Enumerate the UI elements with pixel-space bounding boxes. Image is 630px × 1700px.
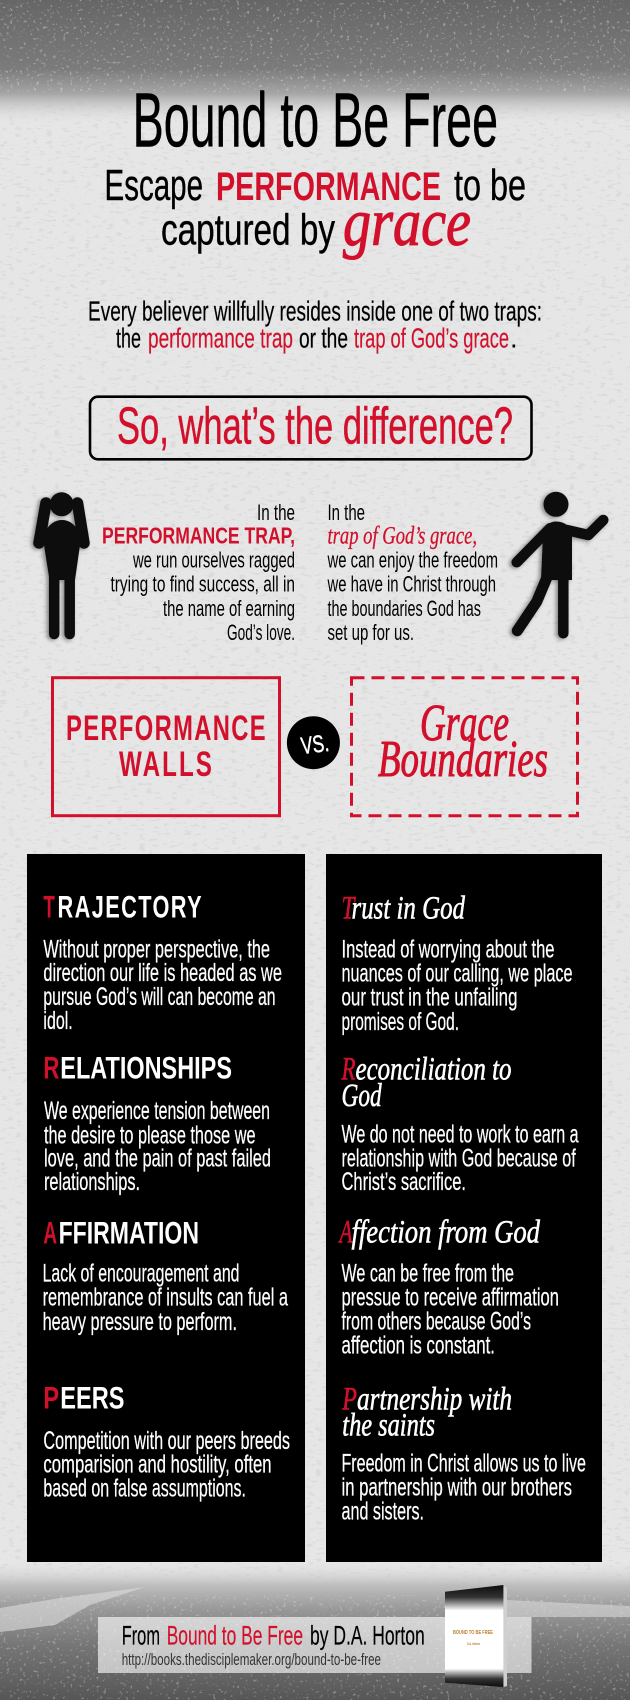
text: affirmation description (43, 1260, 288, 1336)
footer credit band: by D.A. Horton (310, 1620, 425, 1650)
text: trust description: promises of God. (342, 1008, 459, 1036)
text: relationships description: We experience tension between (44, 1097, 270, 1125)
heading: affection from god: A (338, 1215, 353, 1251)
intro text: . (510, 323, 518, 354)
heading: relationships (43, 1049, 232, 1085)
footer credit band (98, 1617, 532, 1673)
text: trap of grace description: we have in Christ through (327, 572, 496, 597)
icon: book cover: BOUND TO BE FREE (453, 1630, 494, 1636)
subtitle: grace (343, 184, 471, 260)
text: reconciliation description (342, 1121, 579, 1196)
text: reconciliation description: Christ’s sacrifice. (342, 1168, 466, 1196)
text: partnership description (342, 1450, 586, 1525)
panel: grace boundaries list (326, 854, 602, 1562)
background: city skyline at bottom (0, 1562, 630, 1700)
heading: relationships: ELATIONSHIPS (60, 1049, 232, 1085)
text: trap of grace description: set up for us. (328, 620, 414, 645)
intro text (88, 296, 542, 354)
background: inverted city skyline at top (0, 0, 630, 125)
heading: reconciliation to god: R (341, 1051, 356, 1087)
text: performance trap description (102, 500, 295, 645)
text: affirmation description: heavy pressure to perform. (43, 1308, 237, 1336)
text: trust description (342, 936, 572, 1036)
text: trajectory description: direction our life is headed as we (43, 959, 282, 987)
subtitle: to be (454, 161, 526, 210)
heading: affirmation: FFIRMATION (59, 1214, 199, 1250)
footer credit band: http://books.thedisciplemaker.org/bound-to-be-free (122, 1650, 381, 1669)
heading: relationships: R (43, 1049, 60, 1085)
heading: partnership with the saints (342, 1381, 512, 1444)
text: trajectory description: idol. (43, 1007, 73, 1035)
subtitle: Escape (104, 161, 203, 210)
heading: partnership with the saints: the saints (342, 1408, 435, 1444)
heading: partnership with the saints: artnership with (357, 1381, 512, 1417)
heading: reconciliation to god: econciliation to (356, 1051, 512, 1087)
text: performance trap description: we run ourselves ragged (132, 548, 295, 573)
text: peers description (43, 1427, 290, 1503)
text: trajectory description: Without proper perspective, the (43, 935, 270, 963)
text: trap of grace description: the boundaries God has (328, 596, 481, 621)
heading: reconciliation to god (341, 1051, 512, 1114)
text: performance trap description: In the (257, 500, 295, 525)
heading: trust in god: T (342, 890, 356, 926)
text: trap of grace description: we can enjoy the freedom (327, 548, 498, 573)
intro text: performance trap (148, 323, 293, 354)
text: performance trap description: trying to find success, all in (110, 572, 295, 597)
heading: partnership with the saints: P (342, 1381, 357, 1417)
subtitle: PERFORMANCE (216, 165, 441, 209)
text: relationships description (44, 1097, 271, 1196)
icon: stressed figure holding head (39, 492, 84, 634)
text: peers description: comparision and hostility, often (43, 1451, 272, 1479)
heading: peers: EERS (60, 1379, 124, 1415)
panel: performance walls list (27, 854, 305, 1562)
vs badge (287, 716, 340, 769)
footer credit band: Bound to Be Free (167, 1620, 303, 1650)
text: performance trap description: PERFORMANCE TRAP, (102, 522, 295, 548)
intro text: or the (299, 323, 348, 354)
text: peers description: Competition with our peers breeds (43, 1427, 290, 1455)
heading: reconciliation to god: God (342, 1078, 382, 1114)
vs badge: VS. (299, 730, 331, 760)
text: relationships description: love, and the pain of past failed (44, 1145, 271, 1173)
box: performance walls: WALLS (119, 745, 214, 784)
intro text: trap of God’s grace (354, 323, 509, 354)
heading: affirmation: A (43, 1214, 57, 1250)
subtitle (104, 161, 526, 260)
heading: trajectory: T (43, 889, 55, 925)
text: affirmation description: remembrance of insults can fuel a (43, 1284, 288, 1312)
text: affection description: affection is constant. (342, 1331, 495, 1359)
text: relationships description: the desire to please those we (44, 1121, 256, 1149)
text: trajectory description: pursue God’s will can become an (43, 983, 276, 1011)
box: grace boundaries (352, 678, 578, 816)
text: trap of grace description: trap of God’s grace, (328, 522, 477, 549)
icon: dancing free figure (517, 492, 603, 633)
heading: peers (43, 1379, 124, 1415)
subtitle: captured by (161, 206, 335, 254)
box: performance walls: PERFORMANCE (66, 709, 267, 748)
text: trap of grace description (327, 500, 498, 645)
text: trap of grace description: In the (328, 500, 365, 525)
text: partnership description: and sisters. (342, 1497, 424, 1525)
heading: affection from god: ffection from God (352, 1215, 540, 1251)
text: affection description: We can be free from the (342, 1260, 514, 1288)
text: trust description: our trust in the unfailing (342, 984, 518, 1012)
heading: trajectory (43, 889, 203, 925)
icon: book cover: D.A. Horton (467, 1641, 480, 1646)
text: peers description: based on false assumptions. (43, 1475, 246, 1503)
box: grace boundaries: Grace (420, 695, 509, 752)
icon: book cover (445, 1585, 507, 1687)
footer credit band: From (122, 1620, 160, 1650)
text: performance trap description: God’s love. (227, 620, 295, 645)
intro text: the (116, 323, 141, 354)
text: affirmation description: Lack of encouragement and (43, 1260, 239, 1288)
heading: trust in god: rust in God (352, 890, 465, 926)
box: grace boundaries: Boundaries (378, 731, 548, 788)
heading: affirmation (43, 1214, 199, 1250)
text: affection description (342, 1260, 559, 1359)
heading: peers: P (43, 1379, 59, 1415)
text: trajectory description (43, 935, 282, 1035)
heading: trajectory: RAJECTORY (58, 889, 203, 925)
text: performance trap description: the name of earning (163, 596, 295, 621)
text: relationships description: relationships. (44, 1168, 140, 1196)
box: performance walls (52, 678, 280, 816)
